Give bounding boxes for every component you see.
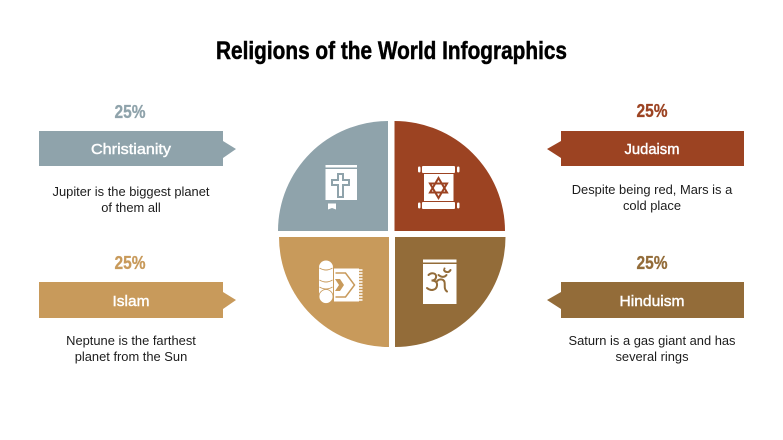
title: Religions of the World Infographics	[216, 37, 567, 65]
description: judaism: cold place	[623, 198, 681, 213]
description: islam: Neptune is the farthest	[66, 333, 196, 348]
panel: christianity	[39, 102, 236, 215]
icon: book with om symbol	[423, 260, 456, 304]
description: islam: planet from the Sun	[75, 349, 187, 364]
quadrant: islam	[279, 237, 389, 347]
banner: judaism	[547, 131, 744, 166]
panel: judaism	[547, 101, 744, 213]
icon: bible with cross	[326, 165, 357, 210]
label: hinduism: Hinduism	[620, 293, 684, 310]
quadrant: christianity	[278, 121, 388, 231]
icon: prayer rug	[319, 260, 362, 304]
pie chart	[278, 121, 506, 347]
panel: hinduism	[547, 253, 744, 364]
banner: hinduism	[547, 282, 744, 318]
banner: christianity	[39, 131, 236, 166]
banner: islam	[39, 282, 236, 318]
description: judaism: Despite being red, Mars is a	[572, 182, 733, 197]
quadrant: judaism	[394, 121, 505, 231]
percentage: islam: 25%	[114, 253, 146, 273]
icon: torah scroll with star	[418, 166, 460, 209]
quadrant: hinduism	[395, 237, 506, 347]
percentage: hinduism: 25%	[636, 253, 668, 273]
description: christianity: Jupiter is the biggest planet	[53, 184, 210, 199]
label: islam: Islam	[112, 293, 150, 310]
description: hinduism: Saturn is a gas giant and has	[569, 333, 735, 348]
percentage: christianity: 25%	[114, 102, 146, 122]
label: christianity: Christianity	[91, 141, 172, 158]
percentage: judaism: 25%	[636, 101, 668, 121]
description: christianity: of them all	[101, 200, 161, 215]
description: hinduism: several rings	[615, 349, 689, 364]
panel: islam	[39, 253, 236, 364]
label: judaism: Judaism	[624, 141, 680, 158]
